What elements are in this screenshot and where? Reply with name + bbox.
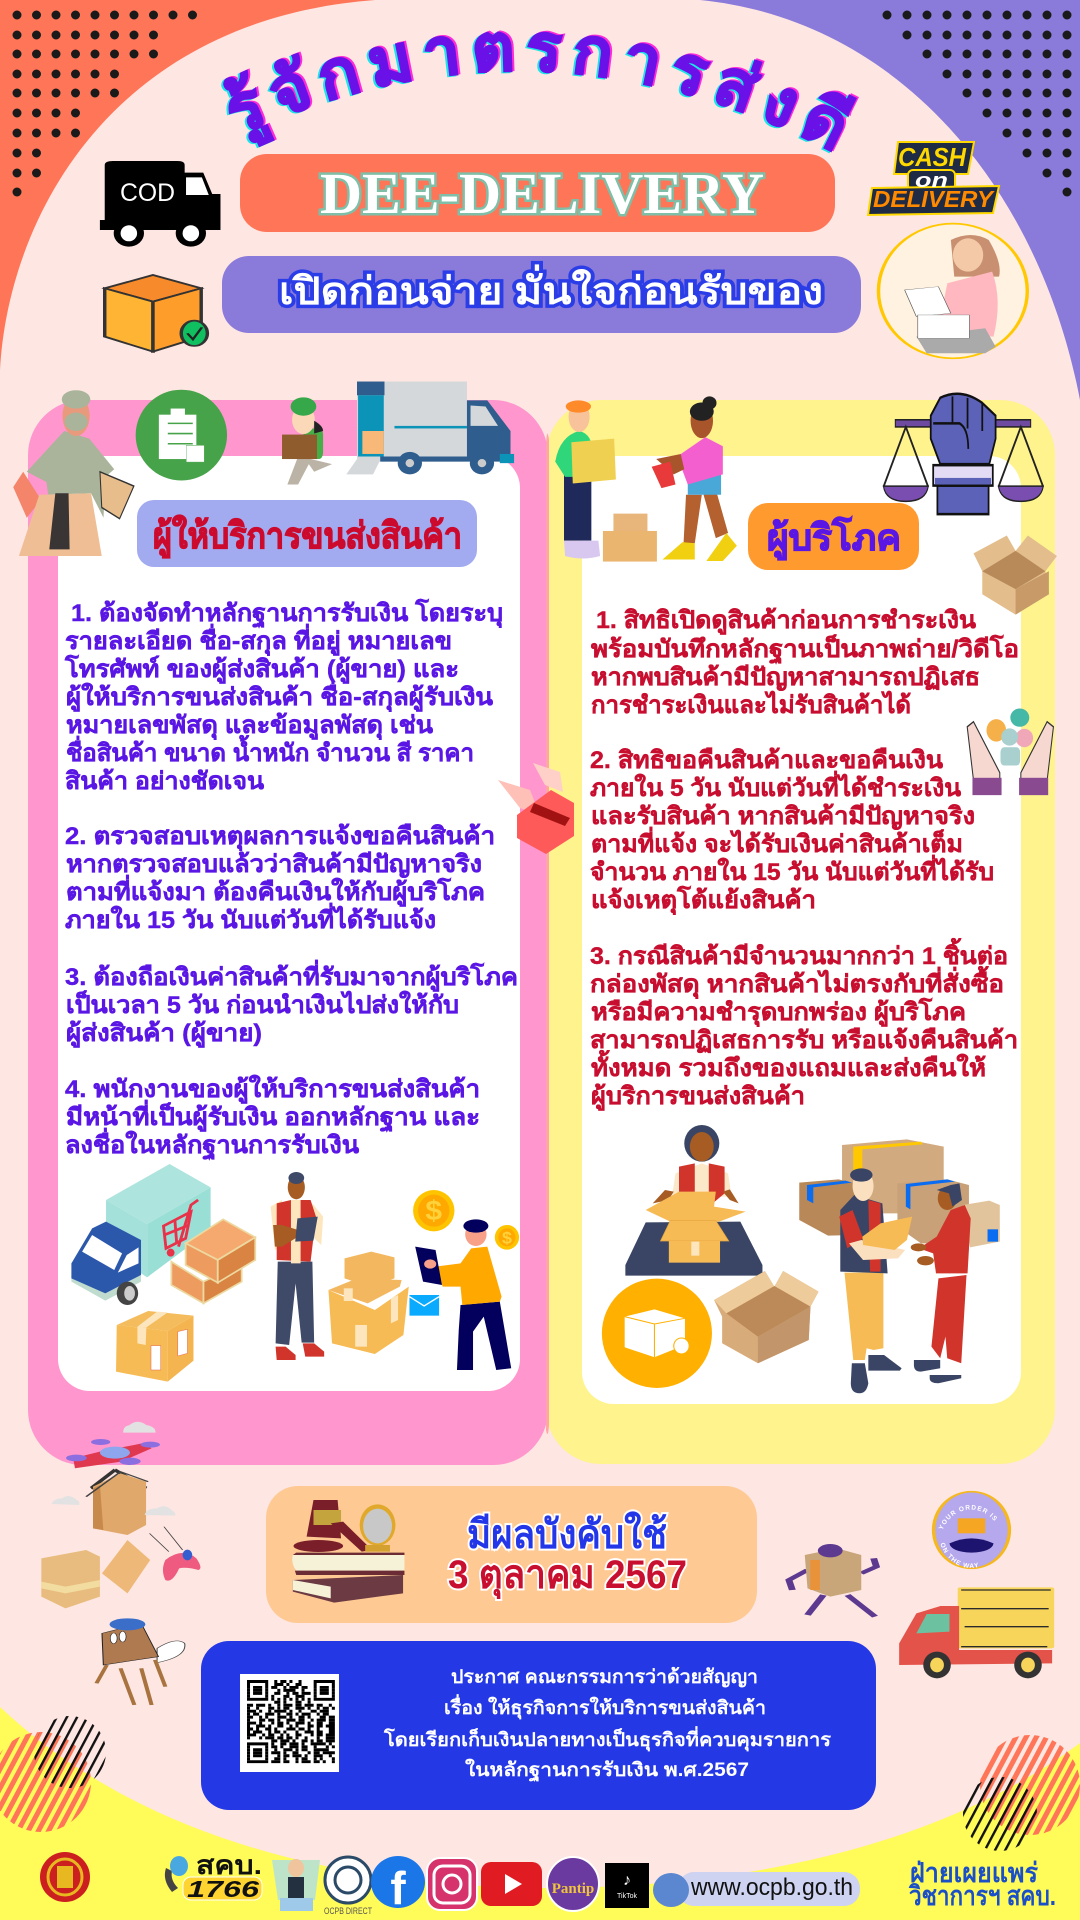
text block: consumer rights: ภายใน 5 วัน นับแต่วันที่ได้ชำระเงิน	[590, 770, 962, 802]
text block: consumer rights: หากพบสินค้ามีปัญหาสามารถปฏิเสธ	[591, 664, 980, 691]
illustration: delivery truck and boxes	[71, 1164, 255, 1382]
qr code	[240, 1674, 339, 1772]
text block: provider duties: ผู้ส่งสินค้า (ผู้ขาย)	[66, 1020, 262, 1048]
badge: your order is on the way: YOUR ORDER IS	[938, 1505, 997, 1529]
icon: parcel with check	[105, 275, 207, 352]
text block: consumer rights: 2. สิทธิขอคืนสินค้าและขอคืนเงิน	[590, 747, 944, 774]
banner: open before paying	[222, 256, 861, 333]
icon: open cardboard box	[714, 1271, 819, 1363]
logo: cash on delivery: on	[915, 170, 948, 192]
notice panel: ประกาศ คณะกรรมการว่าด้วยสัญญา	[451, 1666, 758, 1688]
icon: woman opening parcel	[878, 224, 1027, 358]
icon: facebook: f	[390, 1862, 406, 1914]
illustration: courier with tablet	[271, 1172, 324, 1360]
notice panel: โดยเรียกเก็บเงินปลายทางเป็นธุรกิจที่ควบคุมรายการ	[383, 1726, 832, 1752]
illustration: drone carrying parcel	[52, 1422, 175, 1535]
corner shape: purple top-right	[700, 0, 1080, 400]
text block: provider duties: ตามที่แจ้งมา ต้องคืนเงินให้กับผู้บริโภค	[66, 874, 485, 907]
text block: provider duties: 4. พนักงานของผู้ให้บริการขนส่งสินค้า	[65, 1074, 480, 1104]
title: curved heading: รู้จักมาตรการส่งดี	[221, 30, 859, 154]
text block: provider duties: 3. ต้องถือเงินค่าสินค้าที่รับมาจากผู้บริโภค	[65, 959, 518, 992]
icon: delivery van	[346, 382, 514, 474]
badge: your order is on the way: ON THE WAY	[940, 1542, 978, 1568]
text block: provider duties: รายละเอียด ชื่อ-สกุล ที่อยู่ หมายเลข	[65, 623, 452, 657]
icon: open box top right	[974, 536, 1057, 615]
heading: consumers: ผู้บริโภค	[767, 516, 901, 561]
text block: consumer rights: แจ้งเหตุโต้แย้งสินค้า	[591, 885, 816, 916]
text block: provider duties: สินค้า อย่างชัดเจน	[65, 768, 265, 795]
text block: provider duties	[64, 598, 518, 1161]
icon: fist and scales	[883, 394, 1043, 514]
notice panel	[201, 1641, 876, 1810]
icon: winged parcel	[498, 763, 574, 854]
credit: publisher	[908, 1858, 1056, 1911]
heading: consumers	[748, 503, 919, 570]
website link	[653, 1872, 860, 1907]
logo: pantip: Pantip	[552, 1881, 594, 1897]
dots: top-left	[17, 15, 193, 192]
text block: consumer rights: ผู้บริการขนส่งสินค้า	[591, 1083, 805, 1111]
striped circles: right	[963, 1735, 1080, 1851]
panel: consumers	[546, 400, 1055, 1464]
icon: tiktok	[605, 1863, 649, 1908]
illustration: flying box mascot	[96, 1618, 185, 1705]
icon: COD truck	[100, 161, 220, 247]
icon: running box mascot	[789, 1544, 876, 1617]
website link: www.ocpb.go.th	[690, 1874, 853, 1901]
logo: OCPB direct: OCPB DIRECT	[324, 1906, 372, 1916]
illustration: woman opening box	[625, 1125, 762, 1276]
illustration: couriers handing over parcel	[799, 1139, 1000, 1393]
text block: provider duties: ภายใน 15 วัน นับแต่วันที่ได้รับแจ้ง	[65, 902, 436, 934]
text block: provider duties: ชื่อสินค้า ขนาด น้ำหนัก จำนวน สี ราคา	[66, 734, 474, 767]
date box: มีผลบังคับใช้	[467, 1511, 667, 1557]
illustration: customer paying by tablet: $	[425, 1196, 442, 1227]
icon: hands with care symbols	[967, 708, 1053, 795]
logo: OCPB direct	[324, 1857, 372, 1916]
icon: instagram	[427, 1858, 477, 1910]
illustration: flying boxes and controller	[41, 1527, 200, 1608]
text block: consumer rights: หรือมีความชำรุดบกพร่อง ผู้บริโภค	[591, 997, 966, 1028]
logo: hotline 1766: 1766	[187, 1876, 259, 1902]
text block: provider duties: มีหน้าที่เป็นผู้รับเงิน ออกหลักฐาน และ	[66, 1099, 480, 1133]
banner: open before paying: เปิดก่อนจ่าย มั่นใจก่อนรับของ	[279, 264, 823, 313]
logo: cash on delivery: CASH	[898, 142, 967, 172]
icon: OCPB mascot	[272, 1859, 320, 1911]
text block: provider duties: ลงชื่อในหลักฐานการรับเงิน	[65, 1127, 360, 1161]
text block: provider duties: หากตรวจสอบแล้วว่าสินค้ามีปัญหาจริง	[66, 851, 482, 878]
icon: orange circle with parcel	[602, 1279, 712, 1388]
heading: service providers: ผู้ให้บริการขนส่งสินค้า	[153, 514, 462, 559]
banner: DEE-DELIVERY: DEE-DELIVERY	[320, 161, 764, 226]
text block: provider duties: เป็นเวลา 5 วัน ก่อนนำเงินไปส่งให้กับ	[66, 990, 459, 1019]
text block: provider duties: โทรศัพท์ ของผู้ส่งสินค้า (ผู้ขาย) และ	[64, 654, 459, 684]
corner shape: coral top-left	[0, 0, 375, 370]
text block: consumer rights: 1. สิทธิเปิดดูสินค้าก่อนการชำระเงิน	[596, 607, 977, 635]
logo: hotline 1766: สคบ.	[196, 1850, 262, 1880]
notice panel: ในหลักฐานการรับเงิน พ.ศ.2567	[465, 1758, 749, 1783]
text block: consumer rights: การชำระเงินและไม่รับสินค้าได้	[591, 690, 911, 719]
badge: your order is on the way	[932, 1490, 1012, 1570]
logo: pantip	[547, 1857, 599, 1911]
date box: 3 ตุลาคม 2567	[448, 1553, 687, 1600]
panel: service providers	[28, 400, 548, 1465]
emblem: OCPB seal	[40, 1852, 90, 1902]
icon: tiktok: ♪	[623, 1872, 631, 1889]
illustration: customer paying by tablet: $	[502, 1228, 512, 1247]
dots: top-right	[886, 15, 1067, 192]
text block: consumer rights: จำนวน ภายใน 15 วัน นับแต่วันที่ได้รับ	[590, 854, 994, 886]
banner: DEE-DELIVERY	[240, 154, 835, 232]
icon: two people with parcel	[555, 396, 737, 562]
text block: consumer rights: ทั้งหมด รวมถึงของแถมและส่งคืนให้	[591, 1049, 986, 1082]
icon: facebook	[371, 1856, 425, 1914]
icon: delivery man with box	[13, 390, 134, 556]
text block: provider duties: 2. ตรวจสอบเหตุผลการแจ้งขอคืนสินค้า	[65, 823, 495, 852]
logo: cash on delivery: DELIVERY	[873, 186, 996, 212]
date box	[266, 1486, 757, 1623]
icon: running courier	[282, 397, 332, 485]
illustration: stacked parcels	[328, 1252, 409, 1354]
text block: consumer rights: และรับสินค้า หากสินค้ามีปัญหาจริง	[591, 803, 975, 830]
text block: provider duties: หมายเลขพัสดุ และข้อมูลพัสดุ เช่น	[66, 712, 434, 741]
notice panel: เรื่อง ให้ธุรกิจการให้บริการขนส่งสินค้า	[444, 1694, 766, 1720]
icon: gavel, clock and law books	[292, 1500, 404, 1603]
text block: consumer rights: สามารถปฏิเสธการรับ หรือแจ้งคืนสินค้า	[590, 1027, 1018, 1054]
striped circles: left	[0, 1716, 106, 1832]
text block: consumer rights: ตามที่แจ้ง จะได้รับเงินค่าสินค้าเต็ม	[591, 826, 963, 858]
illustration: customer paying by tablet	[409, 1190, 519, 1370]
icon: tiktok: TikTok	[617, 1893, 637, 1900]
text block: provider duties: 1. ต้องจัดทำหลักฐานการรับเงิน โดยระบุ	[71, 598, 503, 629]
text block: consumer rights	[590, 607, 1019, 1111]
icon: youtube	[481, 1862, 542, 1906]
icon: red and yellow truck	[899, 1587, 1054, 1678]
heading: service providers	[137, 500, 477, 567]
credit: publisher: ฝ่ายเผยแพร่	[910, 1858, 1038, 1888]
text block: consumer rights: 3. กรณีสินค้ามีจำนวนมากกว่า 1 ชิ้นต่อ	[590, 937, 1008, 970]
corner shape: yellow bottom	[0, 1707, 1080, 1920]
text block: provider duties: ผู้ให้บริการขนส่งสินค้า ชื่อ-สกุลผู้รับเงิน	[66, 679, 494, 713]
logo: cash on delivery	[868, 142, 999, 215]
text block: consumer rights: พร้อมบันทึกหลักฐานเป็นภาพถ่าย/วิดีโอ	[591, 634, 1019, 665]
icon: green checklist badge	[136, 390, 227, 480]
text block: consumer rights: กล่องพัสดุ หากสินค้าไม่ตรงกับที่สั่งซื้อ	[590, 965, 1004, 1000]
logo: hotline 1766	[165, 1850, 262, 1902]
icon: COD truck: COD	[120, 179, 175, 207]
